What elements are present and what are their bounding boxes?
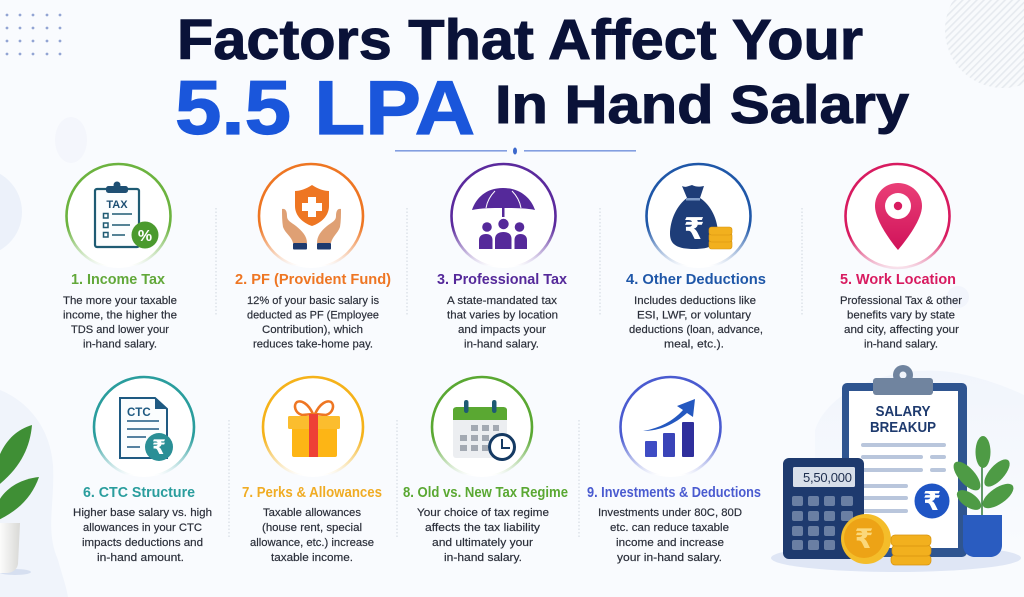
icon: money bag and coins bbox=[646, 164, 750, 268]
description: Includes deductions like bbox=[634, 295, 756, 307]
right potted plant bbox=[949, 436, 1017, 557]
description: allowance, etc.) increase bbox=[250, 537, 374, 549]
icon: tax clipboard bbox=[66, 164, 170, 268]
description bbox=[73, 507, 212, 564]
icon: tax clipboard: % bbox=[138, 228, 152, 245]
description: Investments under 80C, 80D bbox=[598, 507, 742, 519]
panel: perks and allowances bbox=[242, 377, 382, 564]
description: reduces take-home pay. bbox=[253, 338, 373, 350]
heading: 9. Investments & Deductions bbox=[587, 485, 761, 501]
heading: 6. CTC Structure bbox=[83, 485, 195, 501]
description: meal, etc.). bbox=[664, 338, 724, 350]
clipboard: ₹ bbox=[923, 486, 941, 516]
description: taxable income. bbox=[271, 552, 353, 564]
heading: 8. Old vs. New Tax Regime bbox=[403, 485, 568, 501]
title: 5.5 LPA bbox=[175, 66, 475, 151]
illustration: left potted plant bbox=[0, 425, 39, 575]
description bbox=[63, 295, 177, 350]
description: (house rent, special bbox=[262, 522, 362, 534]
description: benefits vary by state bbox=[847, 310, 955, 322]
description: allowances in your CTC bbox=[83, 522, 202, 534]
description: The more your taxable bbox=[63, 295, 177, 307]
description bbox=[598, 507, 742, 564]
coin: ₹ bbox=[855, 524, 873, 554]
title: Factors That Affect Your bbox=[177, 8, 863, 72]
description: in-hand salary. bbox=[464, 338, 539, 350]
panel: ctc structure bbox=[73, 377, 212, 564]
description: affects the tax liability bbox=[425, 522, 540, 534]
description: Your choice of tax regime bbox=[417, 507, 549, 519]
description: in-hand salary. bbox=[444, 552, 522, 564]
icon: calendar and clock bbox=[432, 377, 532, 477]
description: in-hand salary. bbox=[864, 338, 938, 350]
description: in-hand salary. bbox=[83, 338, 157, 350]
description bbox=[247, 295, 379, 350]
description: impacts deductions and bbox=[82, 537, 203, 549]
icon: growth chart bbox=[620, 377, 720, 477]
panel: old vs new tax regime bbox=[403, 377, 568, 564]
heading: 2. PF (Provident Fund) bbox=[235, 272, 391, 288]
description bbox=[417, 507, 549, 564]
heading: 1. Income Tax bbox=[71, 272, 165, 288]
coin bbox=[841, 514, 891, 564]
icon: map pin bbox=[846, 164, 950, 268]
heading: 4. Other Deductions bbox=[626, 272, 766, 288]
icon: gift box bbox=[263, 377, 363, 477]
description: Taxable allowances bbox=[263, 507, 361, 519]
description bbox=[840, 295, 962, 350]
description: that varies by location bbox=[447, 310, 558, 322]
description: deductions (loan, advance, bbox=[629, 324, 763, 336]
illustration: salary breakup bbox=[771, 365, 1024, 572]
description: TDS and lower your bbox=[71, 324, 169, 336]
panel: professional tax bbox=[437, 164, 567, 350]
title: In Hand Salary bbox=[495, 75, 909, 135]
description: deducted as PF (Employee bbox=[247, 310, 379, 322]
description: your in-hand salary. bbox=[617, 552, 722, 564]
title bbox=[175, 8, 909, 151]
description bbox=[250, 507, 374, 564]
icon: ctc document: ₹ bbox=[152, 437, 166, 459]
description: in-hand amount. bbox=[97, 552, 184, 564]
description: Contribution), which bbox=[262, 324, 363, 336]
description: and impacts your bbox=[458, 324, 546, 336]
clipboard bbox=[842, 365, 967, 557]
description: ESI, LWF, or voluntary bbox=[637, 310, 751, 322]
description: etc. can reduce taxable bbox=[610, 522, 729, 534]
description bbox=[629, 295, 763, 350]
title divider bbox=[395, 148, 636, 154]
icon: tax clipboard: TAX bbox=[106, 199, 128, 211]
icon: ctc document bbox=[94, 377, 194, 477]
heading: 3. Professional Tax bbox=[437, 272, 567, 288]
icon: money bag and coins: ₹ bbox=[684, 213, 704, 246]
description: income and increase bbox=[616, 537, 724, 549]
description: Higher base salary vs. high bbox=[73, 507, 212, 519]
calculator: 5,50,000 bbox=[803, 470, 852, 485]
icon: shield and hands bbox=[259, 164, 363, 268]
description: and city, affecting your bbox=[844, 324, 959, 336]
description bbox=[447, 295, 558, 350]
panel: other deductions bbox=[626, 164, 766, 350]
calculator bbox=[783, 458, 864, 559]
coin stack bbox=[891, 535, 931, 565]
description: A state-mandated tax bbox=[447, 295, 557, 307]
clipboard: SALARY bbox=[876, 403, 930, 420]
panel: provident fund bbox=[235, 164, 391, 350]
panel: work location bbox=[840, 164, 962, 350]
description: income, the higher the bbox=[63, 310, 177, 322]
panel: income tax bbox=[63, 164, 177, 350]
heading: 7. Perks & Allowances bbox=[242, 485, 382, 501]
icon: ctc document: CTC bbox=[127, 407, 151, 419]
icon: umbrella and people bbox=[452, 164, 556, 268]
clipboard: BREAKUP bbox=[870, 419, 936, 436]
heading: 5. Work Location bbox=[840, 272, 956, 288]
description: 12% of your basic salary is bbox=[247, 295, 379, 307]
description: and ultimately your bbox=[432, 537, 533, 549]
description: Professional Tax & other bbox=[840, 295, 962, 307]
panel: investments and deductions bbox=[587, 377, 761, 564]
